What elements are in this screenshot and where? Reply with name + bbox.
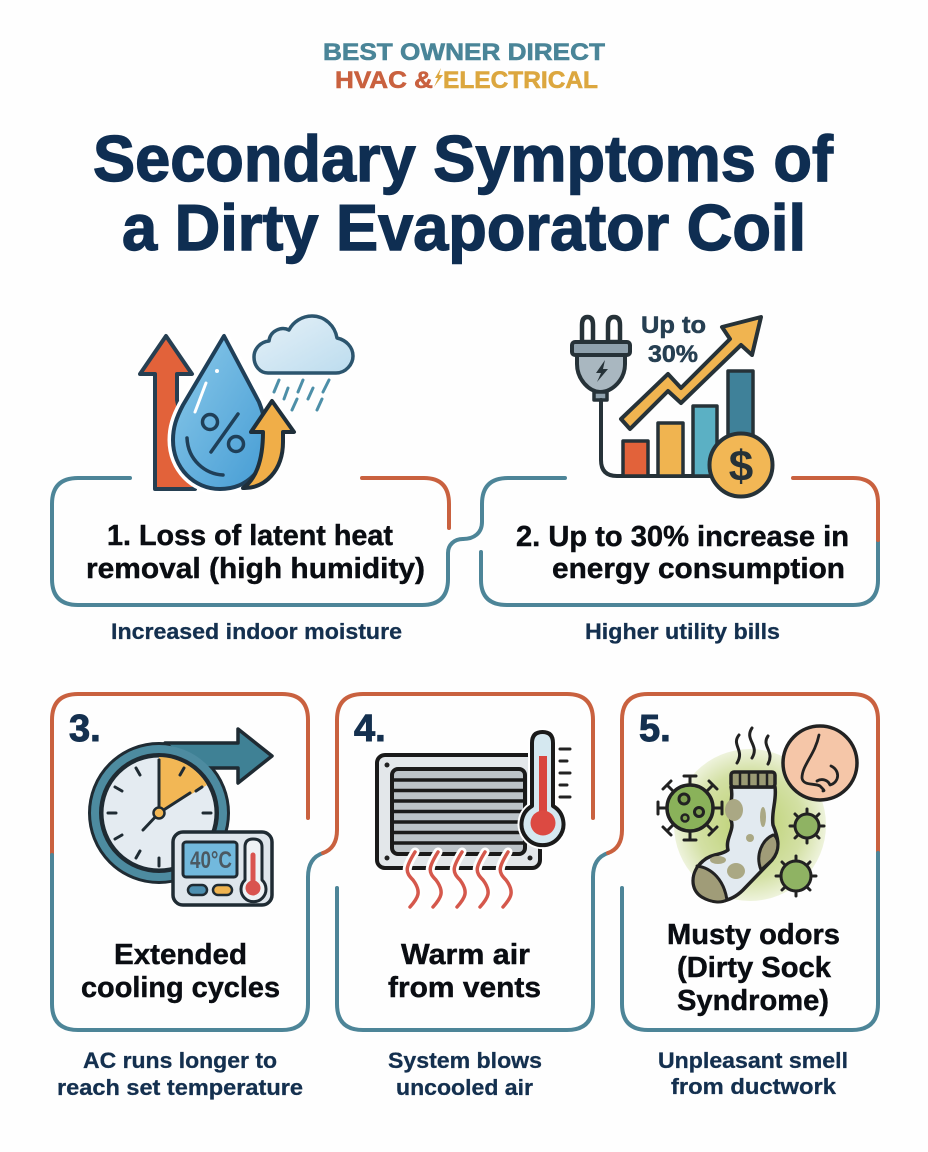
logo	[323, 39, 605, 94]
heading: symptom 1: 1. Loss of latent heat	[107, 520, 393, 552]
icon: vent with thermometer and heat waves	[377, 732, 570, 907]
heading: symptom 3: Extended	[114, 939, 247, 971]
caption: symptom 3: AC runs longer to	[83, 1048, 277, 1073]
caption: symptom 2: Higher utility bills	[585, 619, 780, 644]
heading: symptom 3: cooling cycles	[81, 972, 280, 1004]
title	[93, 122, 833, 264]
heading: symptom 1: removal (high humidity)	[86, 553, 425, 585]
panel: symptom 2	[463, 312, 878, 644]
heading: symptom 2: energy consumption	[552, 553, 845, 585]
label: up to 30%	[641, 312, 706, 368]
number 5: 5.	[639, 708, 671, 750]
heading: symptom 2: 2. Up to 30% increase in	[516, 521, 849, 553]
panel: symptom 4	[323, 694, 608, 1100]
panel: symptom 1	[52, 316, 463, 644]
caption: symptom 5: from ductwork	[671, 1074, 837, 1099]
caption: symptom 1: Increased indoor moisture	[111, 619, 402, 644]
panel: symptom 5	[608, 694, 878, 1099]
title: Secondary Symptoms of	[93, 122, 833, 195]
heading: symptom 5: (Dirty Sock	[677, 952, 832, 984]
label: 40°C: 40°C	[190, 847, 232, 874]
caption: symptom 4: System blows	[388, 1048, 542, 1073]
heading: symptom 5: Syndrome)	[677, 985, 829, 1017]
caption: symptom 4	[388, 1048, 542, 1100]
heading: symptom 1	[86, 520, 425, 585]
icon: plug, bars and coin	[572, 317, 772, 496]
icon: humidity drop	[140, 316, 353, 489]
label: up to 30%: 30%	[648, 341, 698, 368]
heading: symptom 4	[388, 939, 541, 1004]
logo: BEST OWNER DIRECT	[323, 39, 605, 66]
heading: symptom 4: Warm air	[401, 939, 530, 971]
caption: symptom 5: Unpleasant smell	[658, 1048, 848, 1073]
heading: symptom 5: Musty odors	[667, 919, 840, 951]
heading: symptom 3	[81, 939, 280, 1004]
caption: symptom 5	[658, 1048, 848, 1099]
logo: HVAC &	[335, 67, 433, 94]
number 4: 4.	[354, 708, 386, 750]
logo: ELECTRICAL	[443, 67, 598, 94]
heading: symptom 5	[667, 919, 840, 1017]
icon: dirty sock, nose and germs	[658, 726, 857, 902]
title: a Dirty Evaporator Coil	[122, 191, 806, 264]
label: up to 30%: Up to	[641, 312, 706, 339]
number 3: 3.	[69, 708, 101, 750]
heading: symptom 4: from vents	[388, 972, 541, 1004]
label: dollar sign: $	[729, 442, 753, 491]
icon: clock and thermostat	[95, 729, 272, 905]
caption: symptom 3	[57, 1048, 303, 1100]
caption: symptom 3: reach set temperature	[57, 1075, 303, 1100]
caption: symptom 4: uncooled air	[396, 1075, 533, 1100]
heading: symptom 2	[516, 521, 849, 585]
panel: symptom 3	[52, 694, 323, 1100]
